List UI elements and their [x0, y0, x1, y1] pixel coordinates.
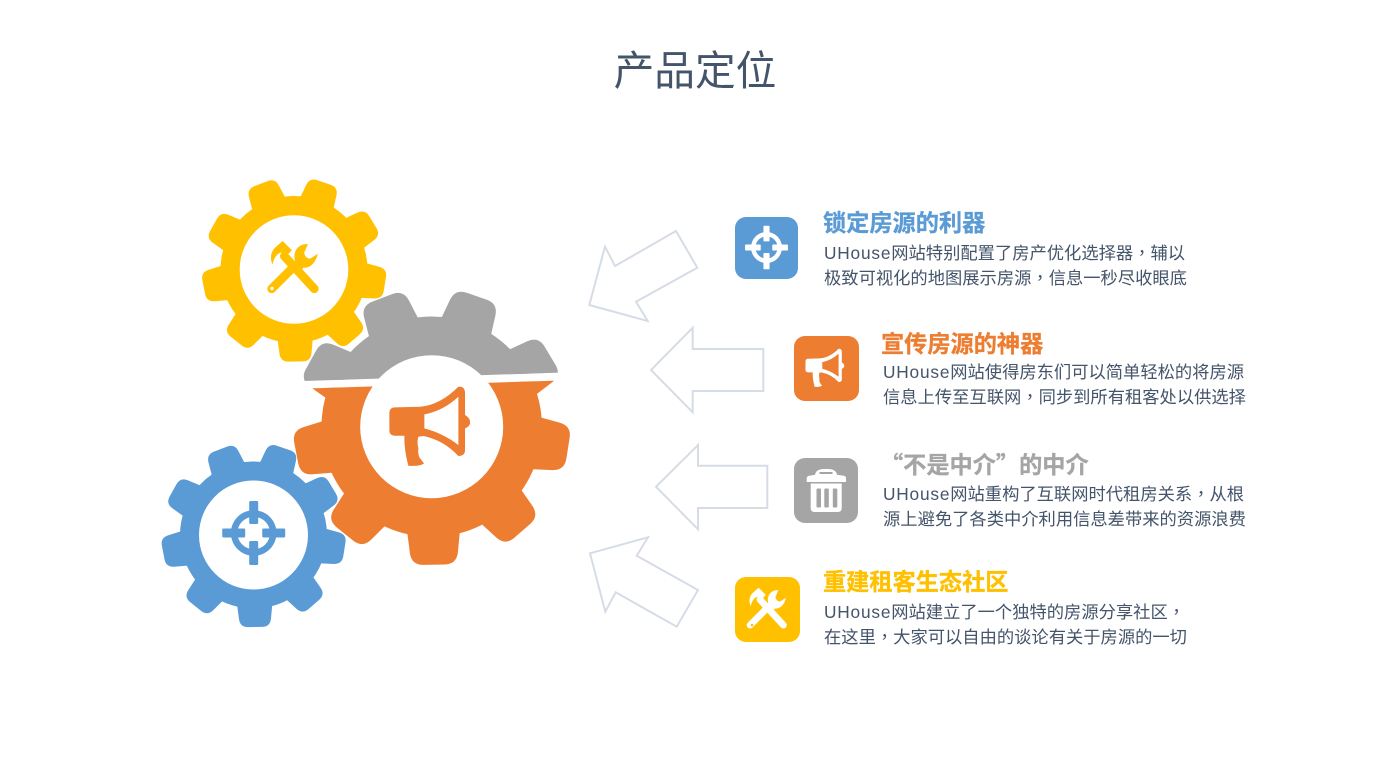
heading: 锁定房源的利器 [823, 210, 985, 236]
description: UHouse网站特别配置了房产优化选择器，辅以 [824, 239, 1185, 264]
blue gear with target icon [158, 441, 349, 629]
item 3: “不是中介”的中介 [794, 446, 1246, 529]
description: UHouse网站重构了互联网时代租房关系，从根 [883, 480, 1244, 505]
item 1: 锁定房源的利器 [735, 210, 1187, 289]
title: 产品定位 [614, 48, 776, 94]
arrow 3 [656, 445, 767, 529]
description: 源上避免了各类中介利用信息差带来的资源浪费 [883, 509, 1246, 529]
description: 信息上传至互联网，同步到所有租客处以供选择 [883, 383, 1246, 408]
icon: target [735, 217, 798, 279]
grey gear half [304, 292, 558, 381]
icon: megaphone [794, 336, 859, 401]
heading: 宣传房源的神器 [881, 331, 1043, 357]
heading: “不是中介”的中介 [880, 446, 1089, 480]
arrow 1 [589, 231, 697, 321]
description [883, 480, 1246, 529]
yellow gear with tools icon [199, 175, 389, 363]
description: UHouse网站使得房东们可以简单轻松的将房源 [883, 362, 1244, 382]
description [824, 239, 1187, 289]
arrow 2 [651, 328, 763, 412]
item 4: 重建租客生态社区 [735, 569, 1187, 648]
icon: tools [735, 577, 800, 642]
description: UHouse网站建立了一个独特的房源分享社区， [824, 598, 1185, 623]
orange gear half with megaphone icon [294, 355, 570, 565]
description: 极致可视化的地图展示房源，信息一秒尽收眼底 [824, 264, 1187, 289]
heading: 重建租客生态社区 [823, 569, 1008, 595]
description [883, 362, 1246, 408]
icon: trash can [794, 458, 858, 523]
description: 在这里，大家可以自由的谈论有关于房源的一切 [824, 623, 1187, 648]
gear cluster [158, 175, 575, 629]
description [824, 598, 1187, 648]
arrow 4 [590, 537, 698, 627]
item 2: 宣传房源的神器 [794, 331, 1246, 408]
